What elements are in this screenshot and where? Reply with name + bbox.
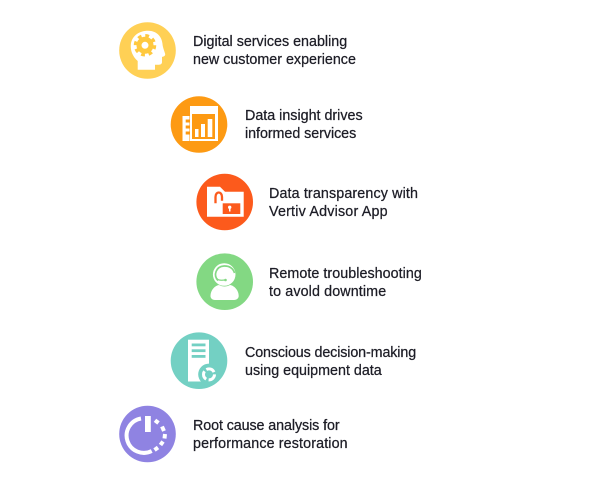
text: digital services <box>193 34 356 68</box>
text: remote troubleshooting <box>269 266 422 300</box>
text: digital services: new customer experience <box>193 52 356 68</box>
text: conscious decision-making <box>245 345 416 379</box>
icon: power button with dashed progress ring <box>119 406 176 462</box>
text: data transparency: Vertiv Advisor App <box>269 204 388 220</box>
icon: server with refresh badge <box>171 332 227 389</box>
text: conscious decision-making: Conscious decision-making <box>245 345 416 361</box>
text: data transparency <box>268 186 418 220</box>
text: root cause analysis <box>193 418 348 452</box>
text: data insight <box>245 108 363 142</box>
text: remote troubleshooting: to avold downtime <box>269 284 386 300</box>
icon: folder with open padlock <box>196 174 253 230</box>
text: data insight: Data insight drives <box>245 108 363 124</box>
text: remote troubleshooting: Remote troubleshooting <box>269 266 422 282</box>
text: data transparency: Data transparency with <box>269 186 418 202</box>
text: digital services: Digital services enabling <box>193 34 347 50</box>
icon: support agent with headset <box>196 253 253 310</box>
icon: head with gear <box>119 22 176 79</box>
text: data insight: informed services <box>245 126 356 142</box>
text: root cause analysis: Root cause analysis for <box>193 418 340 434</box>
icon: data report <box>171 96 227 153</box>
text: conscious decision-making: using equipment data <box>245 363 382 379</box>
text: root cause analysis: performance restoration <box>193 436 348 452</box>
